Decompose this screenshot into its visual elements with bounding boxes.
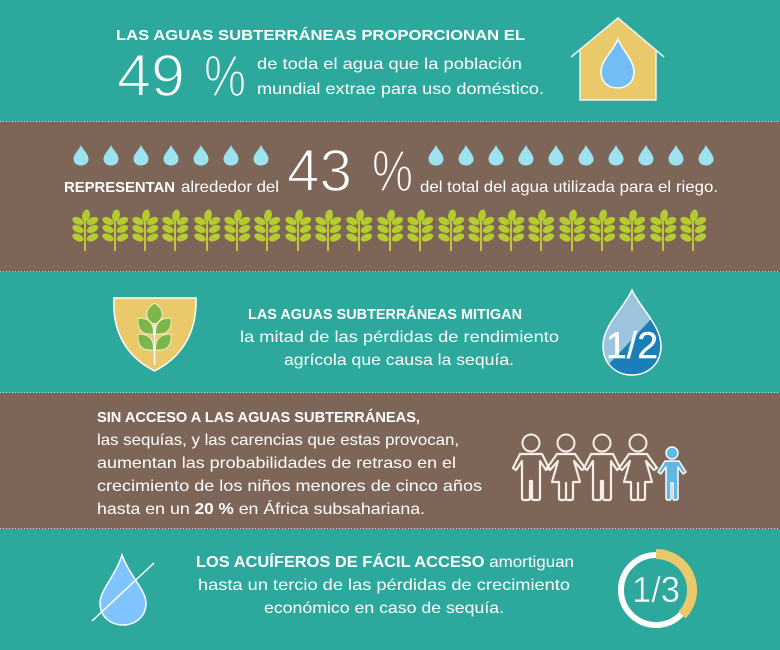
panel: band 4 background bbox=[0, 393, 780, 529]
body line 3: crecimiento de los niños menores de cinco años bbox=[97, 478, 482, 495]
statistic: percent sign: % bbox=[372, 139, 413, 204]
statistic: 49: 49 bbox=[117, 43, 185, 109]
icon: house with water drop bbox=[571, 18, 664, 100]
panel: band 1 background bbox=[0, 0, 780, 121]
body: line 1: de toda el agua que la población bbox=[257, 56, 522, 73]
text: around: alrededor del bbox=[181, 179, 279, 196]
icon: one-third ring bbox=[621, 554, 692, 625]
heading: LAS AGUAS SUBTERRÁNEAS MITIGAN bbox=[248, 306, 522, 323]
line 1: LOS ACUÍFEROS DE FÁCIL ACCESO amortiguan bbox=[196, 554, 574, 571]
icon row: water drops right bbox=[428, 145, 714, 166]
body line 2: aumentan las probabilidades de retraso en el bbox=[97, 455, 456, 472]
panel: band 5 background bbox=[0, 529, 780, 650]
text: represents: REPRESENTAN bbox=[64, 179, 175, 196]
icon: half-filled drop bbox=[603, 290, 661, 375]
body line 1: las sequías, y las carencias que estas provocan, bbox=[97, 432, 459, 449]
text block: child stunting bbox=[97, 409, 482, 518]
icon: child bbox=[658, 447, 686, 500]
text block: mitigate losses bbox=[240, 306, 559, 369]
icon row: water drops left bbox=[74, 145, 268, 166]
text block: 49 percent statement bbox=[116, 27, 544, 109]
text: of total water: del total del agua utilizada para el riego. bbox=[420, 179, 718, 196]
label: one third: 1/3 bbox=[632, 569, 680, 610]
icon: shield with wheat bbox=[114, 298, 196, 371]
panel: band 2 background bbox=[0, 122, 780, 272]
heading: groundwater provides: LAS AGUAS SUBTERRÁNEAS PROPORCIONAN EL bbox=[116, 27, 525, 44]
text block: accessible aquifers bbox=[196, 554, 574, 617]
heading: SIN ACCESO A LAS AGUAS SUBTERRÁNEAS, bbox=[97, 409, 420, 426]
body line 2: agrícola que causa la sequía. bbox=[284, 352, 514, 369]
icon: crossed-out drop bbox=[92, 555, 154, 625]
body: line 2: mundial extrae para uso doméstico. bbox=[257, 81, 544, 98]
body line 1: la mitad de las pérdidas de rendimiento bbox=[240, 329, 559, 346]
line 2: hasta un tercio de las pérdidas de crecimiento bbox=[198, 577, 570, 594]
line 3: económico en caso de sequía. bbox=[264, 600, 504, 617]
statistic: percent sign: % bbox=[204, 44, 246, 109]
icon: family of four adults and a child bbox=[513, 434, 686, 500]
statistic: 43: 43 bbox=[287, 138, 352, 204]
label: one half: 1/2 bbox=[606, 325, 658, 366]
icon row: wheat plants bbox=[71, 209, 707, 251]
text block: 43 percent statement bbox=[64, 138, 718, 204]
panel: band 3 background bbox=[0, 272, 780, 393]
body line 4: hasta en un 20 % en África subsahariana. bbox=[97, 499, 425, 518]
